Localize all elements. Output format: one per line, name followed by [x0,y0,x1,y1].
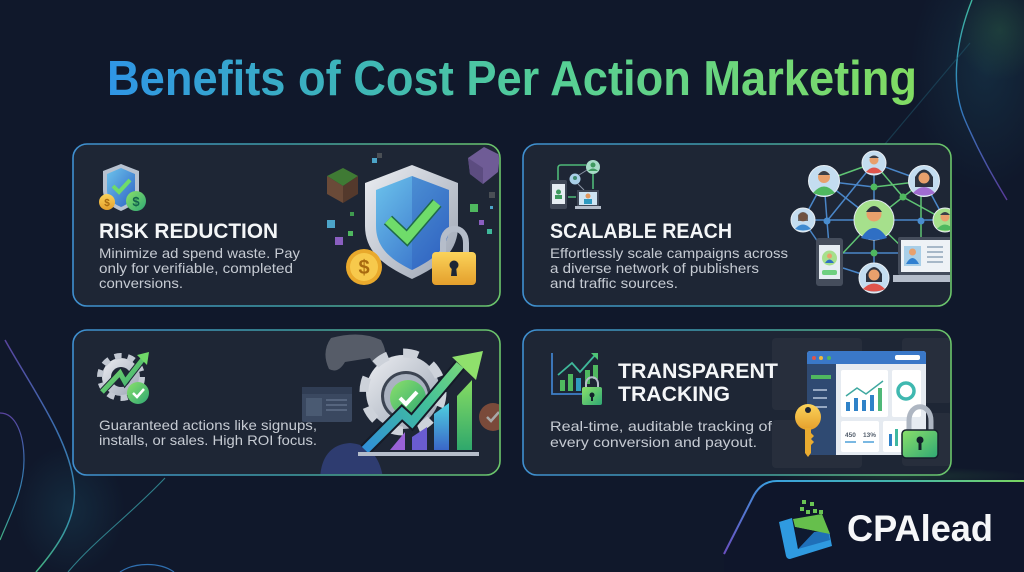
icon: dashboard window: 13% [863,432,876,439]
title: Benefits of Cost Per Action Marketing [107,52,917,106]
icon: shield with coins: $ [104,198,110,209]
text block: every conversion and payout. [550,434,757,450]
icon: CPAlead logo [779,500,832,559]
icon: faded background items [302,334,507,478]
icon: dashboard window [807,351,926,455]
logo corner panel [724,481,1024,572]
icon: gear with arrow [100,352,149,404]
icon: laptop [893,237,951,282]
text block: installs, or sales. High ROI focus. [99,432,317,448]
icon: chart with lock [552,353,602,405]
icon: dashboard window: 450 [845,432,856,439]
logo wordmark: CPAlead [847,508,993,549]
text block: a diverse network of publishers [550,260,759,276]
icon: shield with coins: $ [132,194,140,209]
icon: big shield [365,165,458,279]
icon: small network [550,160,601,209]
panel: scalable reach [523,144,957,306]
text block [99,417,317,448]
text block: conversions. [99,275,183,291]
icon: blocks and pixels [327,147,500,245]
heading: RISK REDUCTION [99,220,278,243]
icon: gold key [795,404,821,457]
text block: Real-time, auditable tracking of [550,418,772,434]
text block: Guaranteed actions like signups, [99,417,317,433]
icon: green padlock [902,407,938,458]
heading: SCALABLE REACH [550,220,732,243]
text block: only for verifiable, completed [99,260,293,276]
heading: TRACKING [618,383,730,406]
icon: gear, bars and growth arrow [358,351,483,456]
text block [550,245,788,291]
icon: gold coin [346,249,382,285]
panel: transparent tracking [523,330,952,475]
text block [550,418,772,450]
text block: Minimize ad spend waste. Pay [99,245,300,261]
heading: TRANSPARENT [618,360,778,383]
icon: padlock [432,229,476,285]
node: center person [854,200,894,240]
heading [618,360,778,406]
icon: shield with coins [99,164,146,211]
text block: and traffic sources. [550,275,678,291]
panel: guaranteed actions [73,330,507,478]
panel: risk reduction [73,144,500,306]
faded background panels [772,338,952,468]
icon: phone [816,238,843,286]
text block [99,245,300,291]
text block: Effortlessly scale campaigns across [550,245,788,261]
network diagram [791,151,957,293]
icon: gold coin: $ [358,257,370,279]
